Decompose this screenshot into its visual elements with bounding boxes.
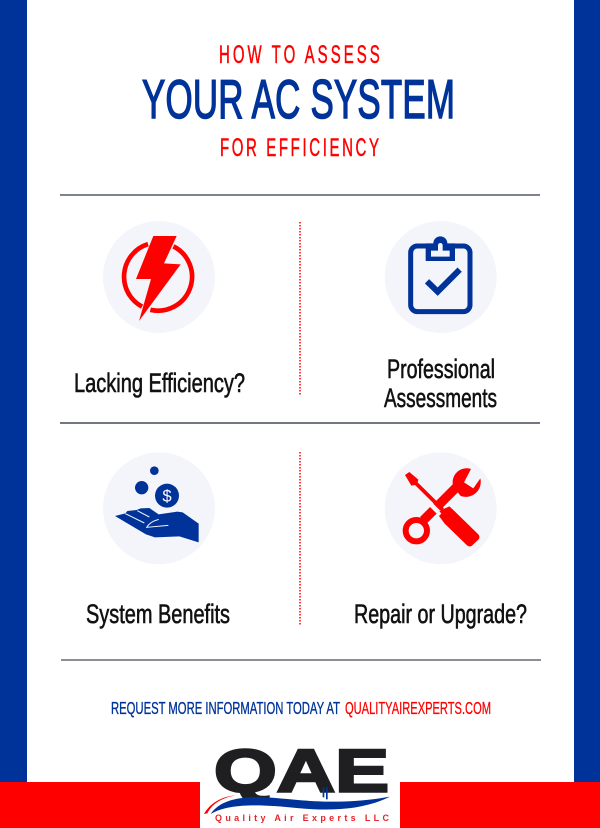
footer call to action: QUALITYAIREXPERTS.COM [345,698,491,718]
logo swoosh [204,787,390,814]
icon: clipboard with check [385,221,497,333]
label: system benefits: System Benefits [86,599,230,629]
title line: how to assess: HOW TO ASSESS [219,41,380,69]
left blue side bar [0,0,27,782]
logo letters: QAE [214,738,389,804]
label: lacking efficiency: Lacking Efficiency? [74,368,245,398]
label: professional assessments: Assessments [384,383,497,413]
panel: lacking efficiency [74,221,245,398]
screwdriver gap [427,501,449,522]
right red footer bar [400,782,600,828]
main title: YOUR AC SYSTEM [142,69,455,130]
panel: repair or upgrade [354,452,527,629]
label: professional assessments: Professional [387,354,495,384]
logo [200,738,400,828]
title line: for efficiency: FOR EFFICIENCY [220,134,379,162]
logo company name: Quality Air Experts LLC [215,813,390,823]
wrench [423,486,457,520]
panel: professional assessments [384,221,497,413]
icon: hand with coins: $ [162,487,172,506]
panel: system benefits [86,452,230,629]
right blue side bar [574,0,600,782]
icon: lightning bolt in ring [103,221,215,333]
icon: wrench and screwdriver [385,452,497,564]
screwdriver handle [439,506,479,547]
icon: hand with coins [103,452,215,564]
label: repair or upgrade: Repair or Upgrade? [354,599,527,629]
label: professional assessments [384,354,497,413]
left red footer bar [0,782,200,828]
screwdriver shaft [405,472,444,511]
footer call to action: REQUEST MORE INFORMATION TODAY AT [111,698,340,718]
title block [142,41,455,162]
